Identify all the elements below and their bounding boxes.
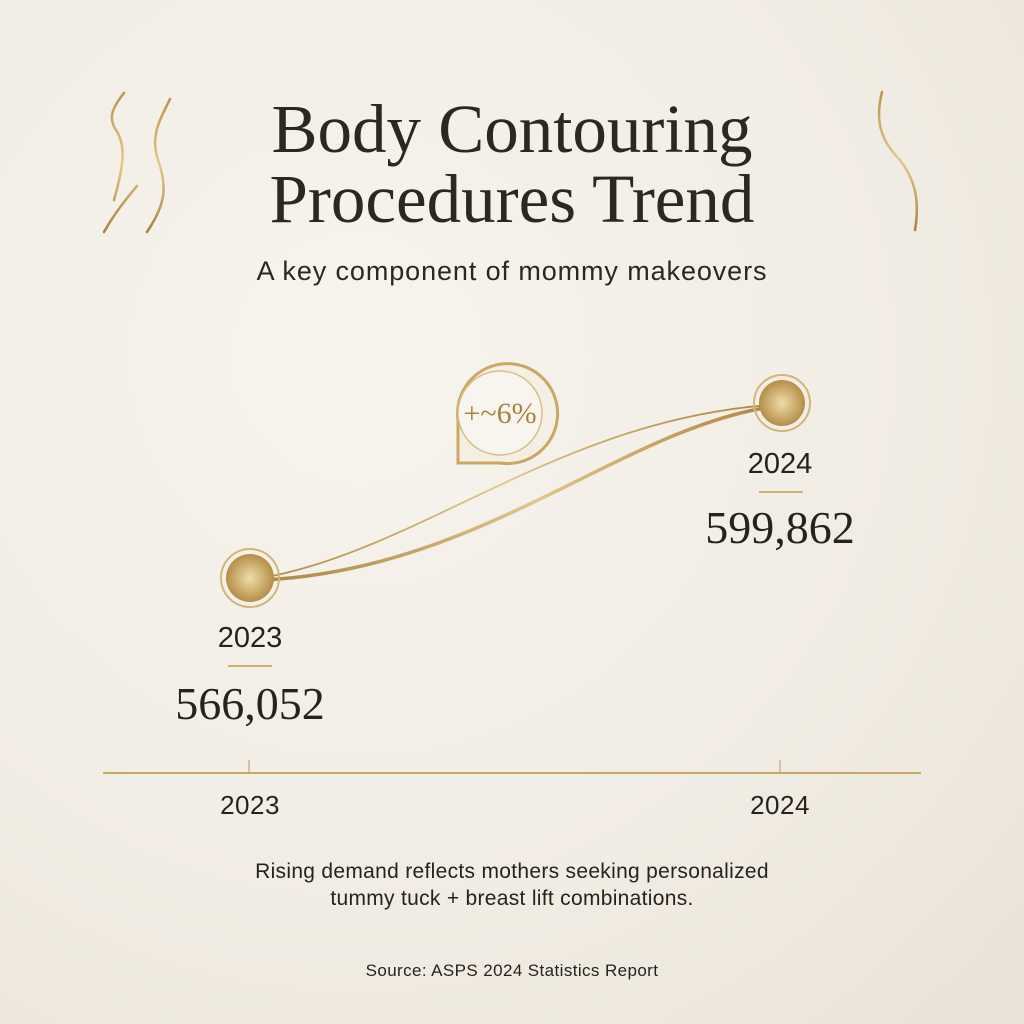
decoration: right body curve	[878, 90, 918, 232]
description: tummy tuck + breast lift combinations.	[330, 887, 694, 910]
title: Body Contouring	[271, 91, 753, 167]
value 2024: 599,862	[705, 502, 855, 553]
marker 2023	[221, 549, 279, 607]
title: Procedures Trend	[270, 161, 754, 237]
axis label 2023: 2023	[220, 790, 280, 820]
value 2023: 566,052	[175, 678, 325, 729]
description	[255, 860, 769, 910]
callout bubble +~6%	[458, 364, 558, 464]
label 2024: 2024	[748, 448, 812, 480]
label 2023: 2023	[218, 622, 282, 654]
description: Rising demand reflects mothers seeking personalized	[255, 860, 769, 883]
decoration: left body silhouette	[102, 92, 172, 234]
subtitle: A key component of mommy makeovers	[257, 256, 767, 286]
marker 2024	[754, 375, 810, 431]
axis	[103, 760, 921, 773]
axis label 2024: 2024	[750, 790, 810, 820]
title	[270, 91, 754, 237]
callout bubble +~6%: +~6%	[463, 397, 537, 430]
trend ribbons	[262, 405, 770, 580]
source: Source: ASPS 2024 Statistics Report	[366, 961, 658, 980]
